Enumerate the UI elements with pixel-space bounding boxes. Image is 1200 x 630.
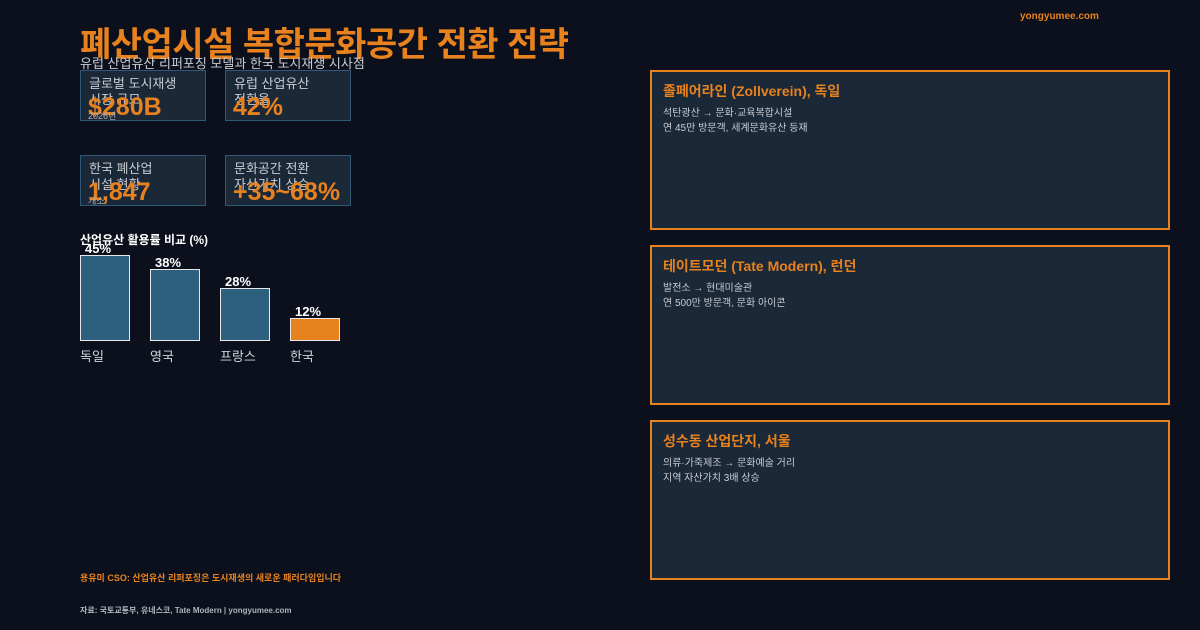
source: 자료: 국토교통부, 유네스코, Tate Modern | yongyumee.com — [80, 606, 292, 615]
bar chart: 독일 — [80, 349, 104, 364]
panel: Tate Modern — [650, 245, 1170, 405]
panel: Seongsu: 성수동 산업단지, 서울 — [663, 433, 791, 449]
panel: Zollverein — [650, 70, 1170, 230]
stat card 1: 2026년 — [88, 111, 116, 121]
stat card 1: 글로벌 도시재생 — [89, 76, 176, 91]
bar chart: 45% — [85, 241, 111, 256]
stat card 1 — [80, 70, 206, 121]
stat card 4 — [225, 155, 351, 206]
panel: Seongsu: 의류·가죽제조 → 문화예술 거리 — [663, 458, 795, 469]
panel: Zollverein: 졸페어라인 (Zollverein), 독일 — [663, 83, 840, 99]
stat card 3: 개소 — [88, 196, 105, 206]
panel: Tate Modern: 테이트모던 (Tate Modern), 런던 — [663, 258, 856, 274]
stat card 2 — [225, 70, 351, 121]
stat card 3: 1,847 — [88, 178, 151, 206]
bar chart: 한국 — [290, 349, 314, 364]
panel: Tate Modern: 연 500만 방문객, 문화 아이콘 — [663, 298, 786, 309]
stat card 2: 42% — [233, 93, 283, 121]
stat card 2: 유럽 산업유산 — [234, 76, 309, 91]
chart title: 산업유산 활용률 비교 (%) — [80, 233, 208, 247]
bar chart: 28% — [225, 274, 251, 289]
stat card 4: 문화공간 전환 — [234, 161, 309, 176]
stat card 1: $280B — [88, 93, 162, 121]
subtitle: 유럽 산업유산 리퍼포징 모델과 한국 도시재생 시사점 — [80, 56, 365, 71]
site url: yongyumee.com — [1020, 11, 1099, 22]
title: 폐산업시설 복합문화공간 전환 전략 — [80, 26, 569, 64]
panel: Tate Modern: 발전소 → 현대미술관 — [663, 283, 752, 294]
panel: Seongsu: 지역 자산가치 3배 상승 — [663, 473, 760, 484]
panel: Zollverein: 석탄광산 → 문화·교육복합시설 — [663, 108, 792, 119]
bar chart — [80, 233, 340, 364]
bar chart: 프랑스 — [220, 349, 256, 364]
stat card 4: 자산가치 상승 — [234, 177, 309, 192]
stat card 4: +35~68% — [233, 178, 340, 206]
stat card 3 — [80, 155, 206, 206]
panel: Zollverein: 연 45만 방문객, 세계문화유산 등재 — [663, 123, 808, 134]
stat card 1: 시장 규모 — [89, 92, 140, 107]
bar chart: 38% — [155, 255, 181, 270]
panel: Seongsu — [650, 420, 1170, 580]
bar chart: 영국 — [150, 349, 174, 364]
bar chart: 12% — [295, 304, 321, 319]
stat card 3: 한국 폐산업 — [89, 161, 152, 176]
stat card 3: 시설 현황 — [89, 177, 140, 192]
quote: 용유미 CSO: 산업유산 리퍼포징은 도시재생의 새로운 패러다임입니다 — [80, 573, 341, 583]
stat card 2: 전환율 — [234, 92, 270, 107]
